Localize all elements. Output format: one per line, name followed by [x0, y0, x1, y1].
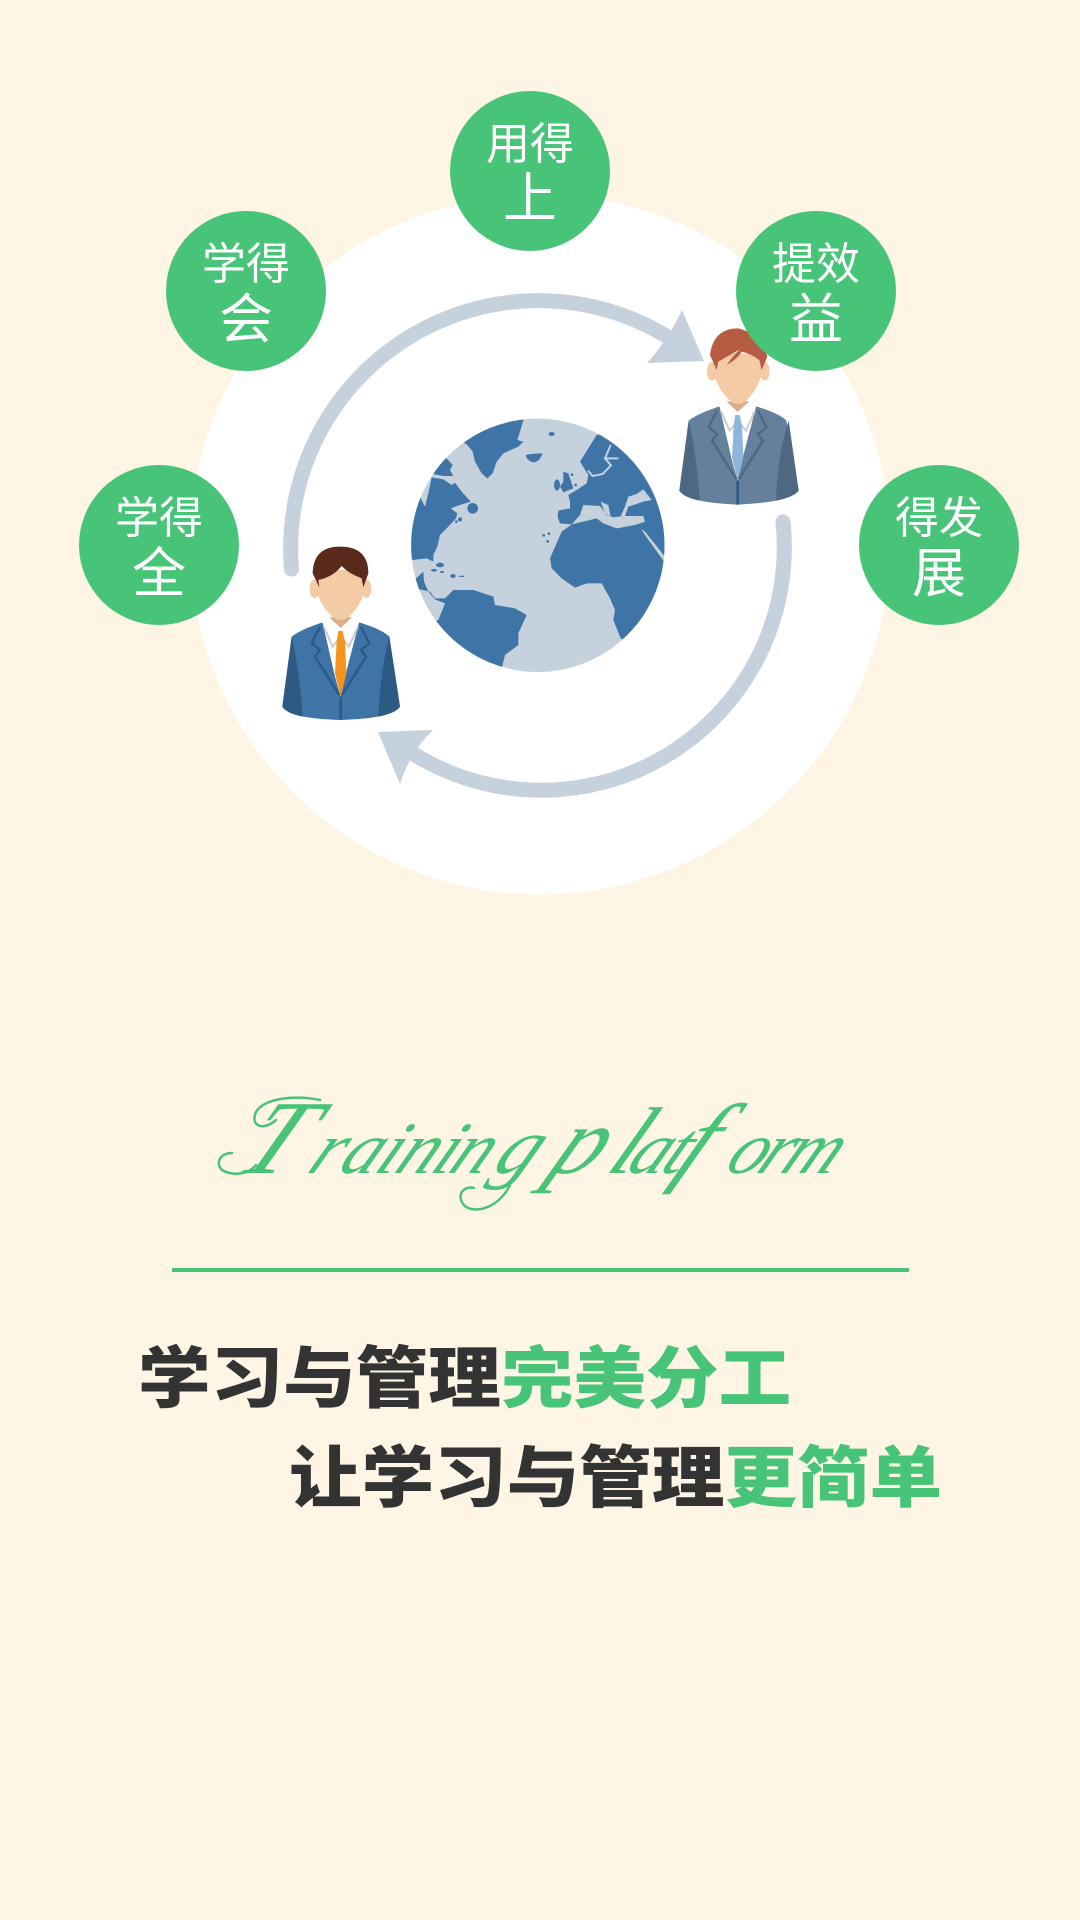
- heading: script title with flourishes: f: [660, 1085, 758, 1195]
- heading: script title with flourishes: T: [220, 1080, 346, 1196]
- badge: 提效益: [736, 211, 896, 371]
- arrow: lower cycle arrow: [378, 522, 784, 790]
- heading: script title with flourishes: [219, 1080, 881, 1209]
- badge: 学得会: 学得: [202, 240, 290, 289]
- badge: 得发展: [859, 465, 1019, 625]
- heading: script title with flourishes: n: [383, 1108, 463, 1190]
- badge: 用得上: 上: [503, 169, 557, 229]
- heading: script title with flourishes: l: [593, 1089, 675, 1194]
- arrow: upper cycle arrow: [291, 301, 704, 569]
- heading: script title with flourishes: m: [769, 1108, 866, 1190]
- badge: 学得全: 全: [132, 544, 186, 604]
- heading: script title with flourishes: g: [481, 1103, 567, 1191]
- heading: script title with flourishes: i: [363, 1108, 427, 1190]
- icon: businessman, grey suit: [679, 328, 799, 505]
- heading: script title with flourishes: n: [437, 1108, 517, 1190]
- panel: white cycle disc: [190, 194, 890, 894]
- heading: script title with flourishes: r: [745, 1108, 817, 1190]
- icon: globe: [411, 418, 664, 672]
- badge: 学得会: 会: [219, 290, 273, 350]
- heading: script title with flourishes: a: [615, 1108, 695, 1190]
- icon: businessman, blue suit: [282, 547, 400, 720]
- heading: script title with flourishes: a: [327, 1108, 407, 1190]
- slogan line 2: 让学习与管理更简单: [289, 1425, 942, 1522]
- badge: 用得上: [450, 91, 610, 251]
- heading: script title with flourishes: i: [419, 1108, 483, 1190]
- badge: 提效益: 益: [789, 290, 843, 350]
- heading: script title with flourishes: t: [649, 1108, 715, 1190]
- badge: 提效益: 提效: [772, 240, 860, 289]
- heading: script title with flourishes: o: [713, 1108, 793, 1190]
- badge: 学得全: [79, 465, 239, 625]
- badge: 得发展: 得发: [895, 494, 983, 543]
- infographic canvas: [79, 91, 1019, 1508]
- heading: script title with flourishes: p: [529, 1089, 638, 1194]
- badge: 学得全: 学得: [115, 494, 203, 543]
- slogan line 1: 学习与管理完美分工: [138, 1325, 791, 1422]
- heading: script title with flourishes: r: [296, 1108, 368, 1190]
- badge: 用得上: 用得: [486, 120, 574, 169]
- badge: 学得会: [166, 211, 326, 371]
- badge: 得发展: 展: [912, 544, 966, 604]
- divider line: [172, 1268, 909, 1272]
